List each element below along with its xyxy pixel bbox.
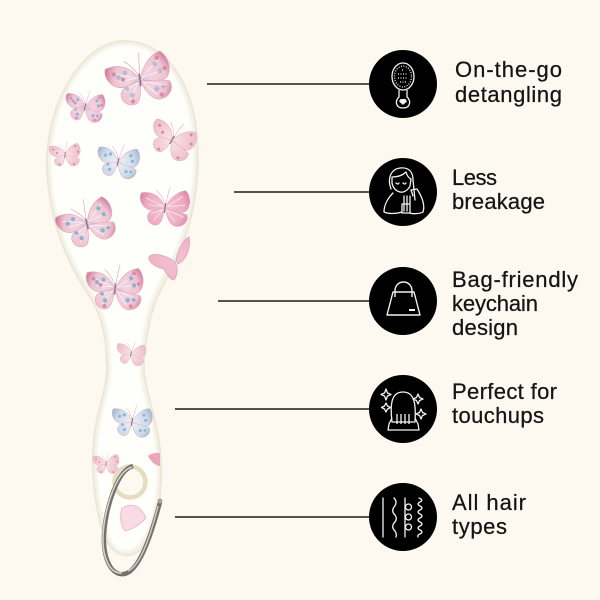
label: bag-friendly keychain design: keychain — [452, 291, 538, 316]
brush edge shadow — [47, 41, 198, 555]
icon: hair types — [369, 483, 437, 551]
brush body — [51, 45, 194, 551]
metal keyring — [103, 466, 160, 574]
butterfly 13 — [148, 453, 160, 466]
butterfly 14 — [121, 505, 146, 531]
butterfly 3 — [143, 111, 201, 166]
label: less breakage — [452, 165, 545, 214]
connector lines — [175, 84, 370, 517]
label: on-the-go detangling: detangling — [455, 82, 562, 107]
label: perfect for touchups: Perfect for — [452, 379, 557, 404]
butterfly 9 — [83, 261, 145, 313]
butterfly 10 — [113, 338, 148, 368]
butterfly 11 — [108, 401, 154, 440]
butterfly 4 — [48, 140, 81, 168]
butterfly 7 — [52, 193, 119, 252]
butterfly 6 — [137, 183, 192, 229]
label: bag-friendly keychain design: Bag-friendly — [452, 267, 578, 292]
label: all hair types — [452, 490, 526, 539]
keyring hole — [114, 466, 146, 498]
label: bag-friendly keychain design: design — [452, 315, 518, 340]
label: on-the-go detangling — [455, 57, 562, 107]
butterfly 5 — [93, 139, 142, 182]
butterfly 12 — [91, 451, 120, 475]
label: bag-friendly keychain design — [452, 267, 578, 340]
butterfly 2 — [62, 86, 107, 125]
keyring clasp — [158, 498, 162, 504]
icon: handbag — [369, 267, 437, 335]
label: all hair types: All hair — [452, 490, 526, 515]
icon: woman brushing hair — [369, 158, 437, 226]
icon: hair dryer hood with sparkles — [369, 375, 437, 443]
label: on-the-go detangling: On-the-go — [455, 57, 562, 82]
label: all hair types: types — [452, 514, 507, 539]
label: less breakage: breakage — [452, 189, 545, 214]
label: perfect for touchups: touchups — [452, 403, 544, 428]
label: perfect for touchups — [452, 379, 557, 428]
product: butterfly hair brush — [47, 41, 201, 574]
butterfly 1 — [103, 48, 174, 108]
butterfly 8 — [149, 237, 189, 280]
label: less breakage: Less — [452, 165, 497, 190]
icon: brush — [369, 50, 437, 118]
